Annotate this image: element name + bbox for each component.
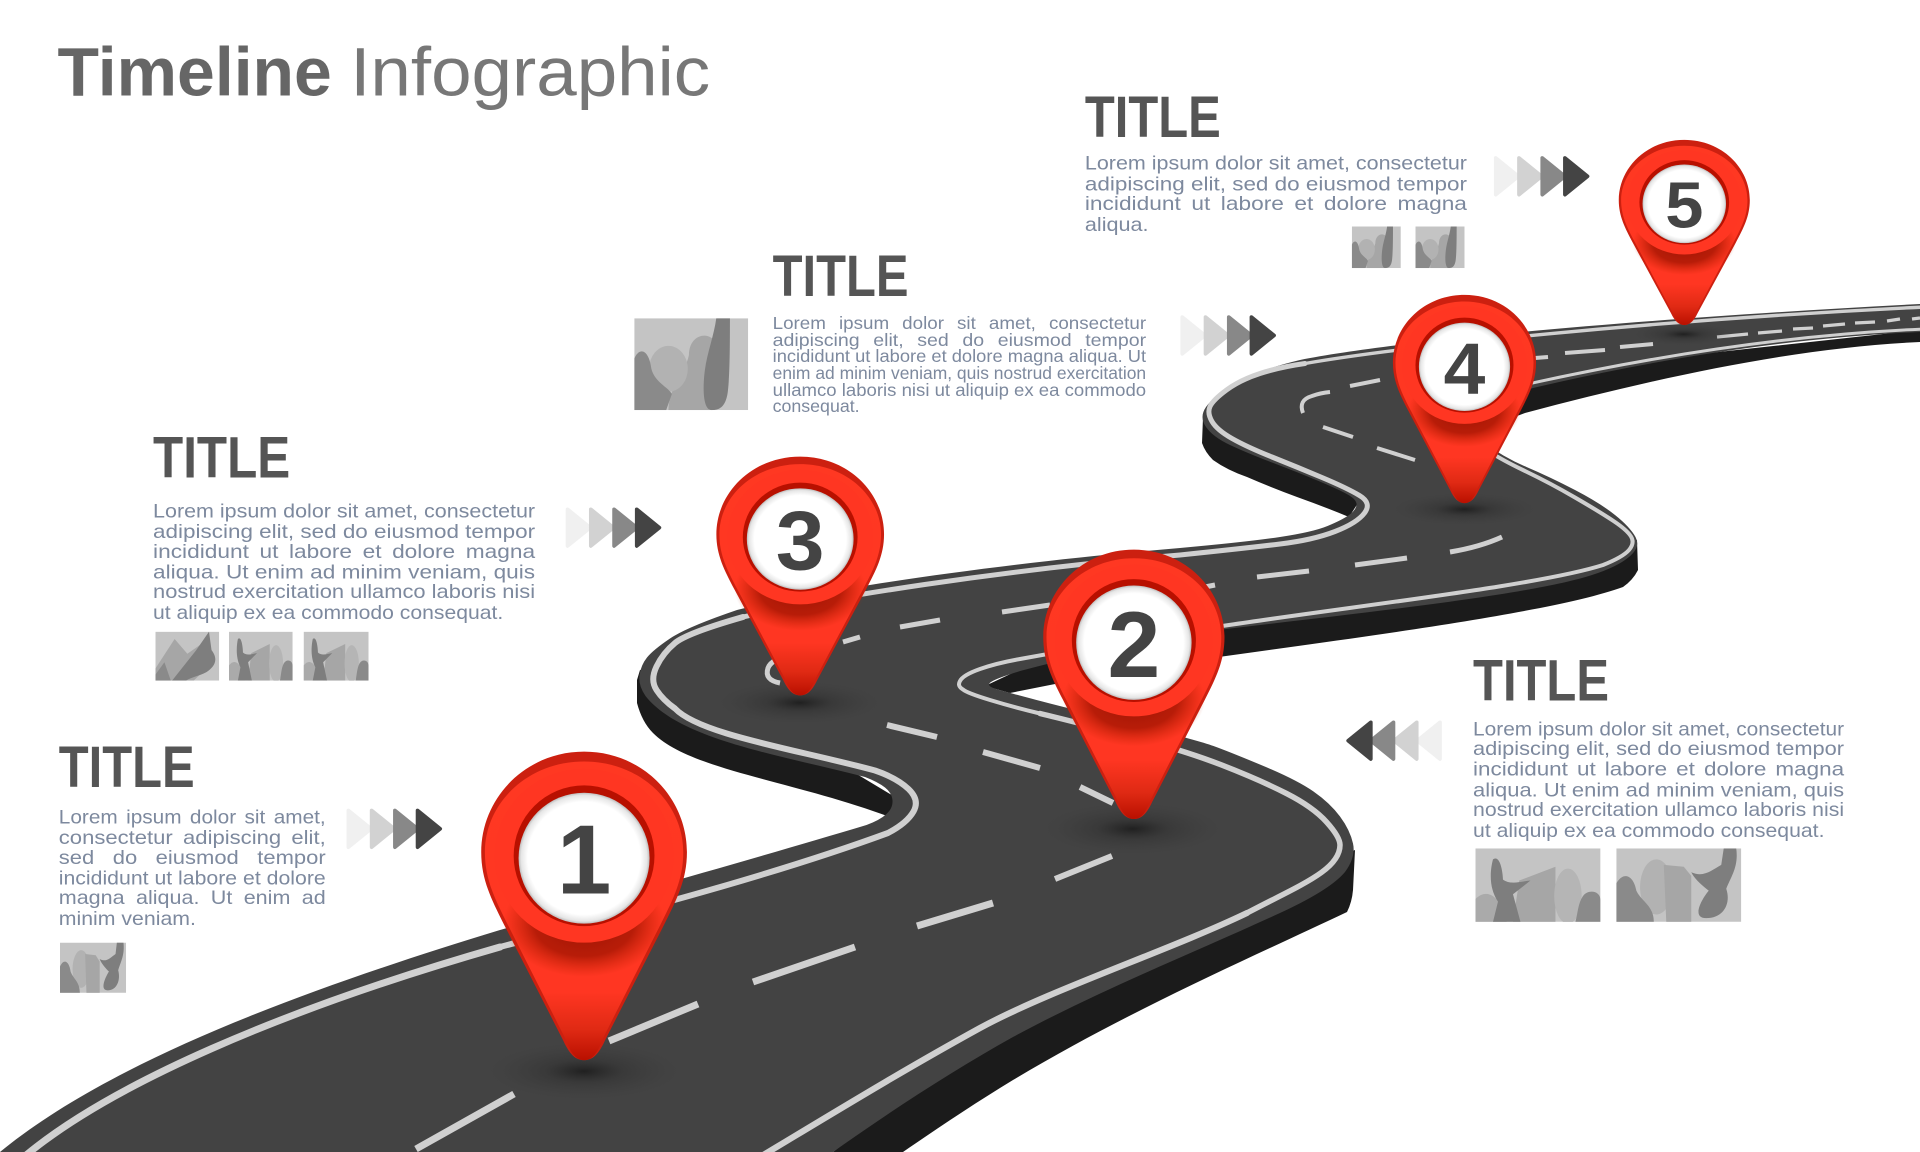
road side walls	[637, 330, 1920, 1152]
step 4 image placeholder	[634, 318, 748, 410]
step 2 body: nostrud exercitation ullamco laboris nisi	[1473, 799, 1844, 821]
step 1 body: incididunt ut labore et dolore	[59, 868, 326, 890]
step 1 body: consectetur adipiscing elit,	[59, 827, 326, 849]
step 5 body	[1085, 153, 1467, 236]
panel: step 1 text	[59, 735, 326, 993]
step 2 body	[1473, 718, 1845, 842]
step 5 heading: TITLE	[1085, 85, 1221, 150]
step 2 body: Lorem ipsum dolor sit amet, consectetur	[1473, 718, 1845, 740]
step 5 body: Lorem ipsum dolor sit amet, consectetur	[1085, 153, 1467, 175]
step 4 heading: TITLE	[773, 244, 909, 309]
step 5 body: aliqua.	[1085, 214, 1149, 236]
pin 5 with shadow: 5	[1665, 170, 1703, 242]
step 4 body	[773, 313, 1146, 416]
arrows: step 1	[348, 810, 440, 847]
step 3 body: aliqua. Ut enim ad minim veniam, quis	[153, 562, 535, 584]
step 1 image placeholder	[60, 943, 126, 993]
step 3 body: nostrud exercitation ullamco laboris nisi	[153, 581, 535, 603]
step 5 body: incididunt ut labore et dolore magna	[1085, 193, 1467, 215]
step 2 body: ut aliquip ex ea commodo consequat.	[1473, 820, 1824, 842]
road edge lines	[25, 307, 1920, 1152]
panel: step 3 text	[153, 425, 536, 682]
step 2 image placeholders	[1476, 848, 1741, 924]
pin 3 with shadow: 3	[776, 494, 825, 588]
step 3 body: adipiscing elit, sed do eiusmod tempor	[153, 521, 536, 543]
pin 2 with shadow	[1043, 550, 1224, 855]
pin 1 with shadow	[481, 752, 687, 1099]
title: Timeline	[58, 33, 332, 110]
road centre dashes	[416, 318, 1920, 1149]
title	[58, 33, 710, 110]
step 3 heading: TITLE	[153, 425, 290, 490]
step 1 body: Lorem ipsum dolor sit amet,	[59, 806, 326, 828]
panel: step 2 text	[1473, 648, 1845, 924]
arrows: step 5	[1496, 158, 1588, 195]
road surface	[0, 304, 1920, 1152]
step 4 body: ullamco laboris nisi ut aliquip ex ea commodo	[773, 380, 1146, 400]
arrows: step 2	[1348, 722, 1440, 759]
pin 2 with shadow: 2	[1107, 592, 1160, 698]
pin 4 with shadow	[1393, 295, 1536, 525]
pin 5 with shadow	[1619, 140, 1750, 345]
step 4 body: consequat.	[773, 396, 860, 416]
pin 1 with shadow: 1	[557, 805, 611, 915]
pin 3 with shadow	[716, 457, 884, 724]
step 1 body: magna aliqua. Ut enim ad	[59, 887, 326, 909]
step 3 body: incididunt ut labore et dolore magna	[153, 541, 535, 563]
step 4 body: enim ad minim veniam, quis nostrud exercitation	[773, 363, 1146, 383]
step 3 body	[153, 500, 536, 624]
step 1 body: minim veniam.	[59, 908, 196, 930]
step 4 body: Lorem ipsum dolor sit amet, consectetur	[773, 313, 1146, 333]
step 2 heading: TITLE	[1473, 648, 1609, 713]
step 5 image placeholders	[1352, 226, 1464, 268]
step 3 body: ut aliquip ex ea commodo consequat.	[153, 602, 503, 624]
pin 4 with shadow: 4	[1444, 327, 1485, 409]
step 4 body: adipiscing elit, sed do eiusmod tempor	[773, 330, 1146, 350]
step 2 body: incididunt ut labore et dolore magna	[1473, 759, 1844, 781]
panel: step 5 text	[1085, 85, 1467, 268]
step 5 body: adipiscing elit, sed do eiusmod tempor	[1085, 173, 1467, 195]
step 2 body: adipiscing elit, sed do eiusmod tempor	[1473, 738, 1845, 760]
step 1 body	[59, 806, 326, 930]
title: Infographic	[350, 33, 710, 110]
winding road	[0, 304, 1920, 1152]
step 3 body: Lorem ipsum dolor sit amet, consectetur	[153, 500, 536, 522]
step 1 body: sed do eiusmod tempor	[59, 847, 326, 869]
step 2 body: aliqua. Ut enim ad minim veniam, quis	[1473, 779, 1844, 801]
arrows: step 4	[1182, 317, 1274, 354]
arrows: step 3	[568, 509, 659, 546]
panel: step 4 text	[634, 244, 1146, 416]
step 3 image placeholders	[156, 632, 369, 682]
step 1 heading: TITLE	[59, 735, 195, 800]
step 4 body: incididunt ut labore et dolore magna aliqua. Ut	[773, 346, 1146, 366]
